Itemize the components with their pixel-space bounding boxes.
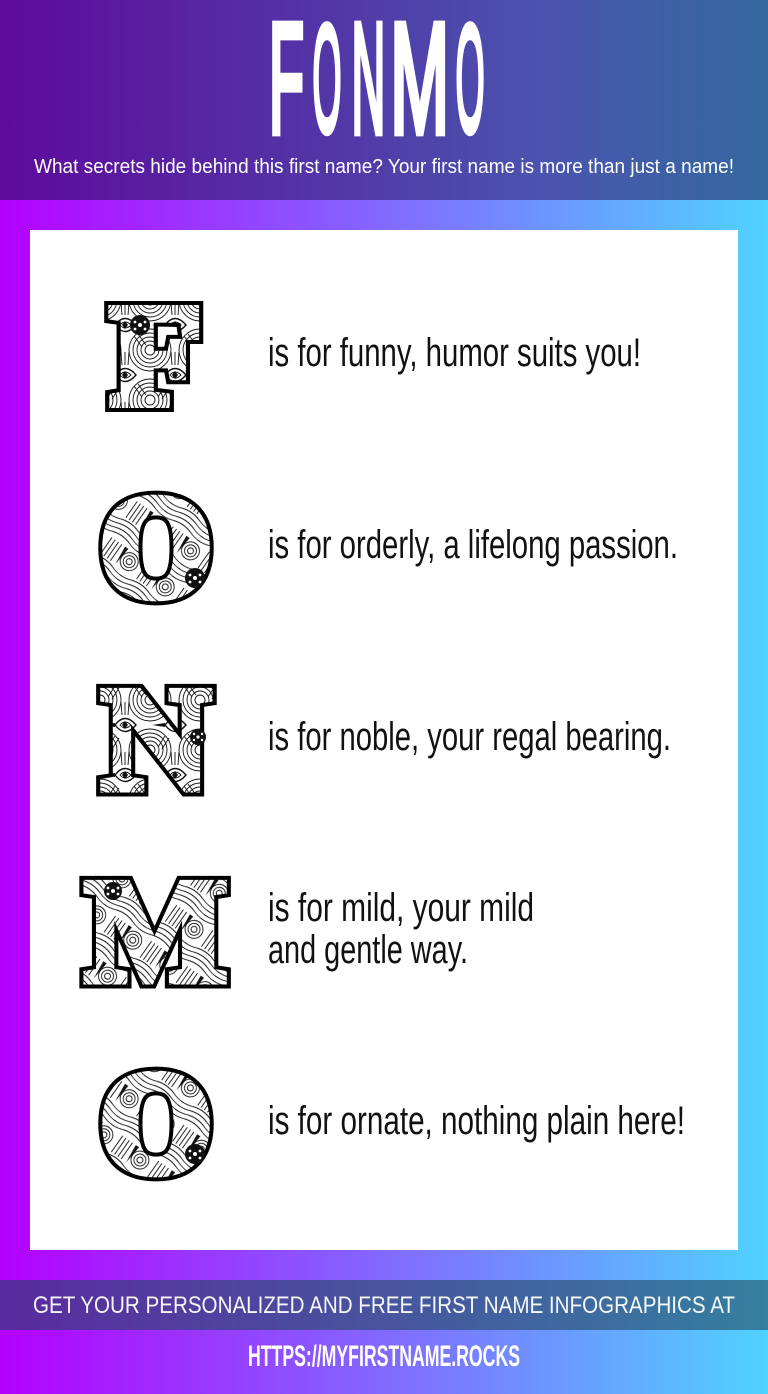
text: F line: is for funny, humor suits you! <box>268 331 641 375</box>
icon: doodle letter O: O <box>102 470 210 623</box>
icon: doodle letter O: O <box>102 1046 210 1199</box>
title: O <box>313 0 341 164</box>
row: letter O <box>102 470 678 623</box>
text: M lines <box>268 886 534 972</box>
icon: doodle letter M: M <box>86 850 226 1012</box>
row: letter F <box>111 276 641 434</box>
icon: doodle letter M: M <box>86 850 226 1012</box>
icon: doodle letter N: N <box>102 658 210 820</box>
text: M lines: and gentle way. <box>268 928 468 972</box>
title: O <box>456 0 484 164</box>
row: letter O second <box>102 1046 685 1199</box>
icon: doodle letter O: O <box>102 470 210 623</box>
website url: HTTPS://MYFIRSTNAME.ROCKS <box>248 1340 520 1373</box>
text: M lines: is for mild, your mild <box>268 886 534 930</box>
row: letter M <box>86 850 534 1012</box>
icon: doodle letter F: F <box>111 276 201 434</box>
icon: doodle letter O: O <box>102 1046 210 1199</box>
subtitle: What secrets hide behind this first name? Your first name is more than just a name! <box>34 156 734 178</box>
icon: doodle letter N: N <box>102 658 210 820</box>
footer band <box>0 1280 768 1330</box>
row: letter N <box>102 658 671 820</box>
icon: doodle letter F: F <box>111 276 201 434</box>
white card <box>30 230 738 1250</box>
header band <box>0 0 768 200</box>
title <box>269 0 484 167</box>
